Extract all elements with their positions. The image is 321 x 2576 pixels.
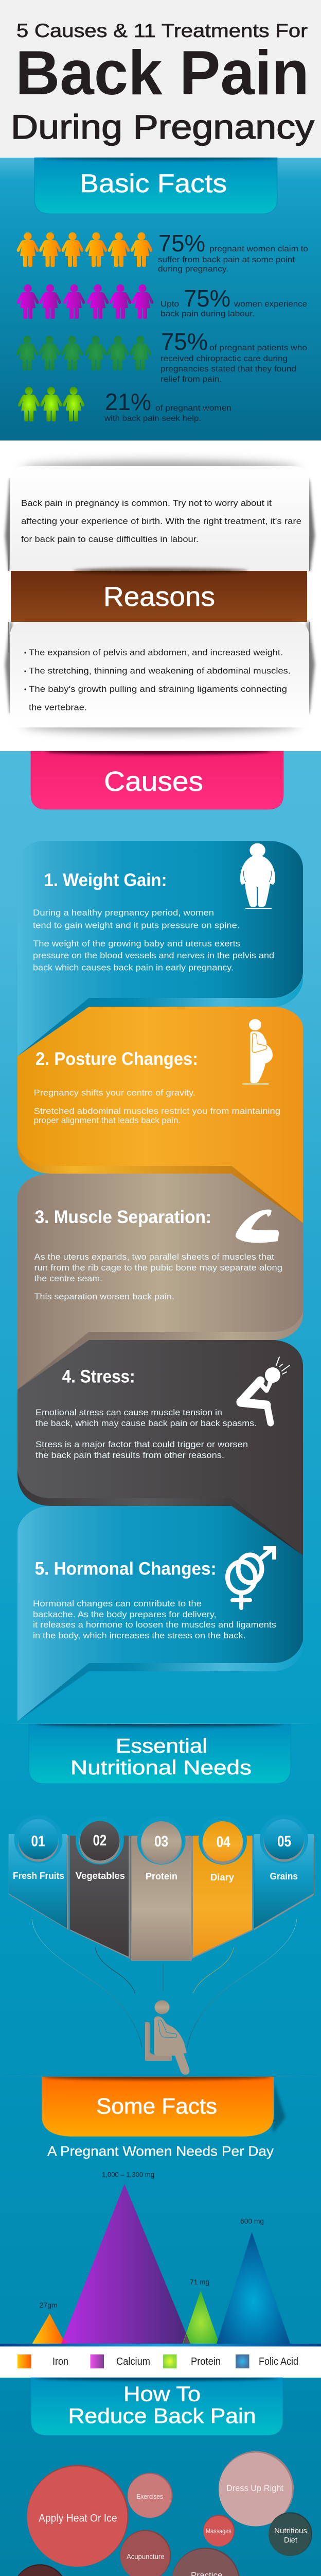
bubble: Acupuncture: Acupuncture: [127, 2552, 165, 2561]
fact text: 75% chiropractic care: 75%: [161, 328, 208, 355]
bubble: Follow Nutritious Diet: [13, 2564, 67, 2576]
heading tab: How To Reduce Back Pain: Reduce Back Pain: [68, 2404, 256, 2428]
panel: how to reduce back pain: [0, 2375, 321, 2576]
panel: reasons: [0, 440, 321, 751]
chart: daily needs triangles: 71 mg: [190, 2278, 209, 2286]
heading tab: Some Facts: Some Facts: [96, 2094, 217, 2119]
fact text: upto 75% labour: 75%: [184, 285, 230, 312]
card 5: hormonal changes: [17, 1506, 303, 1721]
fact text: upto 75% labour: back pain during labour.: [160, 310, 255, 318]
header panel: [0, 0, 321, 158]
card 1: weight gain: 1. Weight Gain:: [44, 870, 167, 890]
bubble: Nutritious Diet: Nutritious: [274, 2527, 307, 2535]
nutrition column 4: diary: Diary: [210, 1872, 234, 1883]
fact text: upto 75% labour: Upto: [160, 300, 179, 309]
bubble: Apply Heat Or Ice: [27, 2465, 129, 2567]
intro card: Back pain in pregnancy is common. Try not to worry about it: [21, 498, 272, 508]
card 5: hormonal changes: 5. Hormonal Changes:: [35, 1559, 217, 1579]
fact text: 75% chiropractic care: received chiropractic care during: [160, 354, 288, 363]
fact text: 75% pregnant women claim: pregnant women claim to: [209, 245, 308, 253]
fact text: 21% seek help: of pregnant women: [155, 404, 231, 413]
title line: During Pregnancy: During Pregnancy: [11, 108, 314, 146]
card 4: stress: Stress is a major factor that could trigger or worsen: [35, 1439, 248, 1449]
legend panel: Protein: [191, 2356, 221, 2367]
chart: daily needs triangles: 600 mg: [240, 2217, 264, 2225]
nutrition column 4: diary: 04: [217, 1834, 230, 1851]
chart: daily needs triangles: 1,000 – 1,300 mg: [102, 2171, 154, 2178]
heading tab: Essential Nutritional Needs: [29, 1721, 291, 1784]
card 5: hormonal changes: in the body, which increases the stress on the back.: [33, 1631, 246, 1640]
fact text: 75% chiropractic care: of pregnant patients who: [209, 344, 307, 352]
chart: daily needs triangles: [32, 2171, 290, 2344]
nutrition column 1: fresh fruits: [9, 1815, 68, 1930]
card 2: posture changes: 2. Posture Changes:: [35, 1049, 198, 1069]
bubble: Nutritious Diet: [269, 2512, 312, 2556]
heading tab: Essential Nutritional Needs: Essential: [116, 1735, 207, 1757]
fact text: 21% seek help: [104, 388, 231, 423]
fact text: upto 75% labour: women experience: [234, 300, 307, 309]
legend panel: [0, 2344, 321, 2378]
icon row: orange women: [17, 232, 152, 267]
nutrition column 1: fresh fruits: Fresh Fruits: [13, 1871, 64, 1881]
heading tab: How To Reduce Back Pain: How To: [123, 2382, 201, 2406]
card 5: hormonal changes: backache. As the body prepares for delivery,: [33, 1609, 217, 1619]
card 3: muscle separation: As the uterus expands, two parallel sheets of muscles that: [34, 1252, 274, 1262]
card 4: stress: the back, which may cause back pain or back spasms.: [35, 1418, 257, 1428]
title line: Back Pain: Back Pain: [15, 38, 309, 108]
bubble: Dress Up Right: [219, 2451, 294, 2527]
intro card: for back pain to cause difficulties in labour.: [21, 534, 199, 544]
icon: gender symbols: [227, 1548, 274, 1608]
nutrition column 4: diary: [192, 1816, 253, 1959]
icon: seated pregnant woman: [145, 2000, 189, 2075]
nutrition column 3: protein: Protein: [146, 1871, 177, 1882]
bubble: Massages: [203, 2515, 235, 2547]
reasons list card: [10, 622, 309, 727]
card 4: stress: 4. Stress:: [62, 1367, 135, 1387]
fact text: 75% pregnant women claim: [158, 230, 308, 274]
icon: stressed person: [241, 1357, 290, 1423]
card 4: stress: the back pain that results from other reasons.: [35, 1450, 224, 1460]
reasons list card: The expansion of pelvis and abdomen, and increased weight.: [29, 648, 283, 657]
legend panel: Calcium: [116, 2356, 150, 2367]
card 5: hormonal changes: it releases a hormone to loosen the muscles and ligaments: [33, 1620, 276, 1630]
card 3: muscle separation: 3. Muscle Separation:: [35, 1207, 211, 1227]
fact text: 75% pregnant women claim: 75%: [158, 230, 205, 257]
card 2: posture changes: [17, 1007, 303, 1223]
card 2: posture changes: Pregnancy shifts your centre of gravity.: [34, 1088, 195, 1097]
nutrition column 2: vegetables: 02: [93, 1832, 106, 1849]
panel: basic facts: [0, 155, 321, 440]
reasons list card: The stretching, thinning and weakening of abdominal muscles.: [29, 666, 291, 676]
nutrition column 3: protein: 03: [154, 1833, 168, 1850]
card 3: muscle separation: This separation worsen back pain.: [34, 1292, 174, 1301]
fact text: 75% chiropractic care: [160, 328, 307, 384]
card 1: weight gain: During a healthy pregnancy period, women: [33, 908, 214, 918]
icon row: lime women: [18, 387, 84, 421]
card 3: muscle separation: the centre seam.: [34, 1274, 102, 1283]
icon row: purple women: [17, 284, 153, 319]
nutrition column 1: fresh fruits: 01: [31, 1833, 45, 1850]
heading band: Reasons: Reasons: [103, 582, 215, 612]
bubble: Practice Good Posture: [172, 2548, 240, 2576]
icon: overweight person: [240, 843, 275, 909]
intro card: [10, 466, 309, 571]
nutrition column 5: grains: [254, 1815, 314, 1930]
card 2: posture changes: proper alignment that leads back pain.: [34, 1115, 181, 1125]
card 1: weight gain: back which causes back pain in early pregnancy.: [33, 963, 234, 973]
card 4: stress: Emotional stress can cause muscle tension in: [35, 1408, 222, 1417]
bubble: Dress Up Right: Dress Up Right: [226, 2483, 283, 2493]
heading tab: Basic Facts: Basic Facts: [80, 169, 227, 198]
nutrition column 2: vegetables: [70, 1816, 130, 1959]
reasons list card: the vertebrae.: [29, 703, 87, 712]
heading tab: Basic Facts: [34, 155, 279, 214]
bubble: Massages: Massages: [206, 2528, 231, 2535]
bubble: Exercises: [128, 2473, 173, 2518]
bubble: Nutritious Diet: Diet: [284, 2536, 298, 2545]
card 1: weight gain: pressure on the blood vessels and nerves in the pelvis and: [33, 951, 274, 960]
intro card: affecting your experience of birth. With the right treatment, it's rare: [21, 516, 301, 526]
bubble: Exercises: Exercises: [136, 2493, 163, 2500]
fact text: 75% chiropractic care: pregnancies stated that they found: [160, 365, 296, 374]
heading tab: Essential Nutritional Needs: Nutritional Needs: [70, 1757, 252, 1779]
heading tab: How To Reduce Back Pain: [31, 2375, 283, 2435]
heading band: Reasons: [11, 568, 307, 622]
card 3: muscle separation: run from the rib cage to the pubic bone may separate along: [34, 1263, 282, 1273]
legend panel: Folic Acid: [259, 2356, 298, 2367]
chart: daily needs triangles: 27gm: [39, 2301, 58, 2309]
bubble: Acupuncture: [120, 2530, 171, 2576]
nutrition column 2: vegetables: Vegetables: [76, 1871, 125, 1881]
card 1: weight gain: The weight of the growing baby and uterus exerts: [33, 939, 240, 948]
fact text: 75% chiropractic care: relief from pain.: [160, 375, 222, 384]
bubble: Apply Heat Or Ice: Apply Heat Or Ice: [39, 2512, 117, 2524]
nutrition column 5: grains: Grains: [270, 1871, 298, 1882]
fact text: 75% pregnant women claim: during pregnancy.: [158, 265, 228, 274]
title line: 5 Causes & 11 Treatments For: 5 Causes & 11 Treatments For: [16, 20, 308, 41]
reasons list card: The baby's growth pulling and straining ligaments connecting: [29, 684, 287, 694]
heading tab: Causes: Causes: [104, 766, 203, 797]
panel: causes: [0, 748, 321, 1723]
icon: pregnant profile: [243, 1019, 273, 1084]
heading tab: Some Facts: [42, 2074, 286, 2137]
card 3: muscle separation: [17, 1174, 303, 1389]
heading tab: Causes: [31, 748, 283, 809]
icon row: green women: [16, 336, 151, 370]
card 2: posture changes: Stretched abdominal muscles restrict you from maintaining: [34, 1106, 280, 1116]
subheading: A Pregnant Women Needs Per Day: A Pregnant Women Needs Per Day: [47, 2144, 274, 2159]
fact text: upto 75% labour: [160, 285, 307, 318]
icon: flexed arm: [236, 1210, 279, 1243]
card 5: hormonal changes: Hormonal changes can contribute to the: [33, 1599, 202, 1608]
panel: essential nutritional needs: [0, 1721, 321, 2344]
nutrition column 5: grains: 05: [277, 1833, 291, 1850]
card 1: weight gain: [17, 841, 303, 1056]
card 1: weight gain: tend to gain weight and it puts pressure on spine.: [33, 920, 240, 930]
legend panel: Iron: [52, 2356, 68, 2367]
card 4: stress: [17, 1340, 303, 1555]
fact text: 21% seek help: 21%: [105, 388, 151, 415]
fact text: 75% pregnant women claim: suffer from back pain at some point: [158, 256, 295, 264]
nutrition column 3: protein: [131, 1816, 192, 1961]
fact text: 21% seek help: with back pain seek help.: [104, 414, 201, 423]
